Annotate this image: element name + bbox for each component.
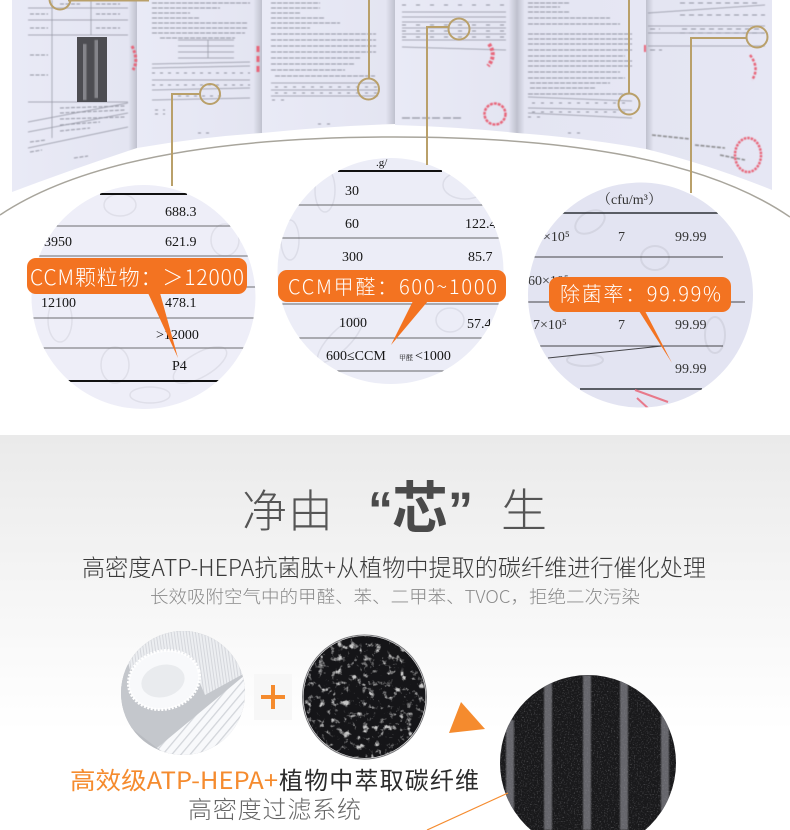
callout: sterilization rate (549, 277, 731, 363)
page 1 (12, 0, 137, 192)
filter system title: 植物中萃取碳纤维 (279, 761, 479, 796)
filter system subtitle: 高密度过滤系统 (188, 790, 361, 825)
heading (242, 464, 547, 545)
filter system title: 高效级ATP-HEPA+ (70, 761, 278, 796)
table values: 7×10⁵ (533, 318, 567, 333)
arrow triangle (449, 702, 485, 733)
callout: CCM formaldehyde: CCM甲醛：600~1000 (288, 271, 497, 300)
table rules (278, 205, 505, 371)
table values: 600≤CCM (326, 349, 386, 364)
table values: 1000 (339, 316, 367, 331)
table values: 7 (618, 318, 625, 333)
table values: 688.3 (165, 205, 196, 220)
table values: 30 (345, 184, 359, 199)
callout: CCM particulate (27, 258, 247, 358)
table values: 12100 (41, 296, 76, 311)
document text and tables (28, 0, 765, 160)
callout: sterilization rate: 除菌率：99.99% (560, 278, 721, 307)
red stamps (132, 44, 761, 172)
table values: （cfu/m³） (597, 192, 662, 208)
table values: 478.1 (165, 296, 196, 311)
plus sign (254, 674, 292, 720)
table values: 85.7 (468, 250, 492, 265)
orange pointer line (427, 793, 508, 830)
panel: test report documents (12, 0, 772, 192)
watermark (567, 205, 725, 366)
table values: 122.4 (465, 217, 496, 232)
table values: <1000 (415, 349, 451, 364)
table values: 99.99 (675, 318, 706, 333)
circle: CCM particulate detail (30, 185, 256, 409)
table values (41, 205, 199, 374)
table values: 甲醛 (399, 353, 413, 362)
heavy rules (561, 213, 718, 389)
page 3 (262, 0, 395, 133)
circle: sterilization rate detail (528, 182, 753, 410)
table values: 99.99 (675, 362, 706, 377)
callout: CCM formaldehyde (278, 270, 506, 345)
page 2 (137, 0, 262, 148)
watermark (280, 174, 476, 362)
table values: 99.99 (675, 230, 706, 245)
page 5 (517, 0, 646, 149)
table rules (528, 257, 745, 358)
description: 长效吸附空气中的甲醛、苯、二甲苯、TVOC，拒绝二次污染 (150, 584, 640, 609)
image: HEPA filter material (121, 631, 245, 760)
table rules (30, 226, 256, 348)
watermark (48, 194, 239, 403)
filter system title (70, 761, 479, 796)
table values (528, 192, 706, 377)
decorative swoosh curve (0, 137, 790, 217)
image: activated carbon granules (302, 635, 427, 759)
callout: CCM particulate: CCM颗粒物：＞12000 (30, 262, 244, 292)
table values: 7 (618, 230, 625, 245)
page 4 (395, 0, 517, 133)
table values: 60 (345, 217, 359, 232)
table values (326, 157, 496, 364)
image: carbon fibre filter close-up (500, 675, 676, 830)
table values: 57.4 (467, 317, 492, 332)
heading: 净由 (242, 475, 333, 540)
table values: 3950 (44, 235, 72, 250)
table values: ×10⁵ (543, 230, 570, 245)
subtitle: 高密度ATP-HEPA抗菌肽+从植物中提取的碳纤维进行催化处理 (82, 549, 706, 583)
heading: 生 (501, 475, 547, 541)
page 6 (646, 0, 772, 190)
heading: “ (368, 482, 393, 538)
panel: lower section background (0, 435, 790, 830)
table values: .g/ (376, 157, 388, 169)
table values: 300 (342, 250, 363, 265)
photo of sample (77, 37, 107, 102)
table values: 60×10⁵ (528, 274, 569, 289)
gold leader lines and target rings (50, 0, 768, 193)
table values: P4 (172, 359, 187, 374)
heading: ” (448, 482, 473, 538)
red stamp fragment (635, 390, 668, 410)
heavy rule (338, 170, 442, 172)
circle: CCM formaldehyde detail (278, 157, 505, 384)
sample detail in photo (84, 40, 97, 100)
heading: 芯 (392, 464, 448, 545)
table values: >12000 (156, 328, 199, 343)
table values: 621.9 (165, 235, 196, 250)
heavy rules (66, 194, 220, 381)
